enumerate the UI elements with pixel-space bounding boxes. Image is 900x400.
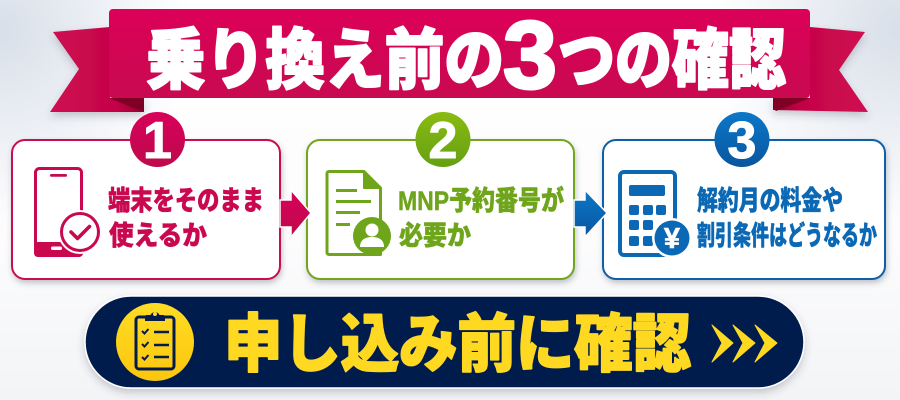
panel: step 1 <box>12 112 280 279</box>
step 1 text <box>108 186 264 251</box>
icon: clipboard checklist <box>116 303 194 381</box>
number badge 3: 3 <box>728 112 756 170</box>
icon: document with person <box>327 172 391 255</box>
ribbon left tail <box>50 27 144 112</box>
panel: step 3 <box>603 112 885 279</box>
icon: phone with check <box>34 168 102 257</box>
icon: triple chevrons <box>712 325 777 362</box>
ribbon body <box>109 9 810 98</box>
step 3 text: 解約月の料金や <box>697 186 843 216</box>
step 2 text <box>398 185 564 251</box>
number badge 3 <box>714 112 770 170</box>
ribbon left fold <box>109 98 144 111</box>
number badge 2: 2 <box>429 112 457 170</box>
title text: 3 <box>503 2 557 109</box>
title text <box>146 2 786 109</box>
panel: step 2 <box>307 112 574 279</box>
bar body <box>85 296 804 388</box>
call to action bar <box>85 296 804 388</box>
card 2 <box>307 140 574 279</box>
step 1 text: 端末をそのまま <box>108 186 264 216</box>
title text: 乗り換え前の <box>146 23 504 97</box>
step 3 text <box>697 186 877 251</box>
step 2 text: MNP予約番号が <box>398 185 564 216</box>
title text: つの確認 <box>558 23 786 97</box>
ribbon right tail <box>773 27 868 112</box>
step 1 text: 使えるか <box>109 221 207 251</box>
title ribbon <box>50 2 868 112</box>
number badge 1 <box>130 112 185 170</box>
call to action text: 申し込み前に確認 <box>224 310 691 380</box>
ribbon right fold <box>773 98 810 111</box>
icon: calculator with yen: ¥ <box>664 223 680 255</box>
card 1 <box>12 140 280 279</box>
card 3 <box>603 140 885 279</box>
icon: calculator with yen <box>620 172 692 258</box>
arrow: step 1 to 2 <box>280 190 311 237</box>
step 2 text: 必要か <box>399 221 471 251</box>
number badge 1: 1 <box>143 112 172 170</box>
arrow: step 2 to 3 <box>574 190 607 237</box>
number badge 2 <box>416 112 470 170</box>
